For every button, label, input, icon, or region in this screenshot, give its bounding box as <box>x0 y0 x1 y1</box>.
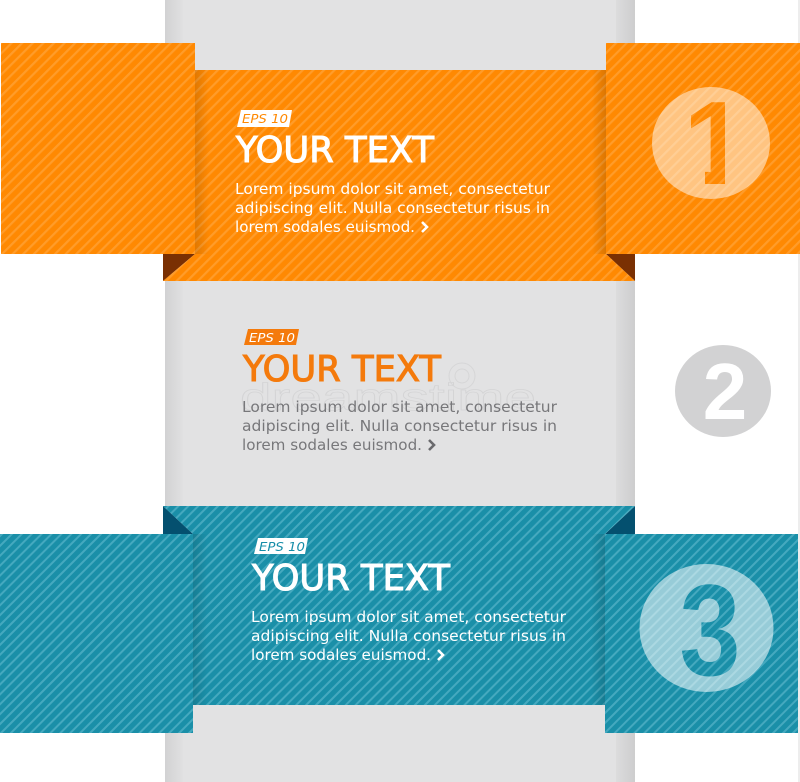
EPS tag: EPS 10 <box>259 540 305 554</box>
EPS tag: EPS 10 <box>249 331 295 345</box>
body text: adipiscing elit. Nulla consectetur risus in <box>251 627 566 645</box>
number badge 2: 2 <box>703 347 747 436</box>
body text: adipiscing elit. Nulla consectetur risus in <box>242 417 557 435</box>
page edge line <box>798 0 800 782</box>
body text: Lorem ipsum dolor sit amet, consectetur <box>235 180 551 198</box>
teal right flap <box>605 534 798 733</box>
number badge 2 <box>675 345 771 437</box>
panel: teal ribbon <box>0 506 798 733</box>
number badge 1 <box>652 87 770 199</box>
orange left flap <box>1 43 195 254</box>
number badge 1: 1 <box>683 77 749 210</box>
body text: Lorem ipsum dolor sit amet, consectetur <box>251 608 567 626</box>
EPS tag <box>244 329 299 345</box>
heading: YOUR TEXT <box>235 130 435 171</box>
body text <box>251 608 567 664</box>
EPS tag <box>237 110 292 127</box>
body text <box>242 398 558 454</box>
EPS tag: EPS 10 <box>242 112 288 126</box>
teal fold triangle right <box>605 506 635 534</box>
body text <box>235 180 551 236</box>
orange right flap <box>606 43 800 254</box>
orange text block <box>235 110 551 236</box>
EPS tag <box>254 538 308 554</box>
body text: lorem sodales euismod. <box>235 218 415 236</box>
gray text block <box>242 329 558 454</box>
panel: orange ribbon <box>1 43 800 281</box>
arrow <box>429 440 434 450</box>
teal band <box>163 506 635 705</box>
panel: central gray column <box>165 0 635 782</box>
arrow <box>422 222 427 232</box>
orange fold triangle right <box>606 254 635 281</box>
orange band <box>163 70 635 281</box>
body text: lorem sodales euismod. <box>242 436 422 454</box>
teal left flap <box>0 534 193 733</box>
number badge 3: 3 <box>680 557 740 703</box>
arrow <box>438 650 443 660</box>
heading: YOUR TEXT <box>242 349 442 390</box>
panel: gray section <box>240 329 771 454</box>
teal fold triangle left <box>163 506 193 534</box>
number badge 3 <box>640 557 774 703</box>
body text: adipiscing elit. Nulla consectetur risus in <box>235 199 550 217</box>
teal text block <box>251 538 567 664</box>
body text: Lorem ipsum dolor sit amet, consectetur <box>242 398 558 416</box>
watermark <box>240 363 536 419</box>
orange fold triangle left <box>163 254 195 281</box>
body text: lorem sodales euismod. <box>251 646 431 664</box>
heading: YOUR TEXT <box>251 558 451 599</box>
watermark: dreamstime <box>240 377 536 419</box>
